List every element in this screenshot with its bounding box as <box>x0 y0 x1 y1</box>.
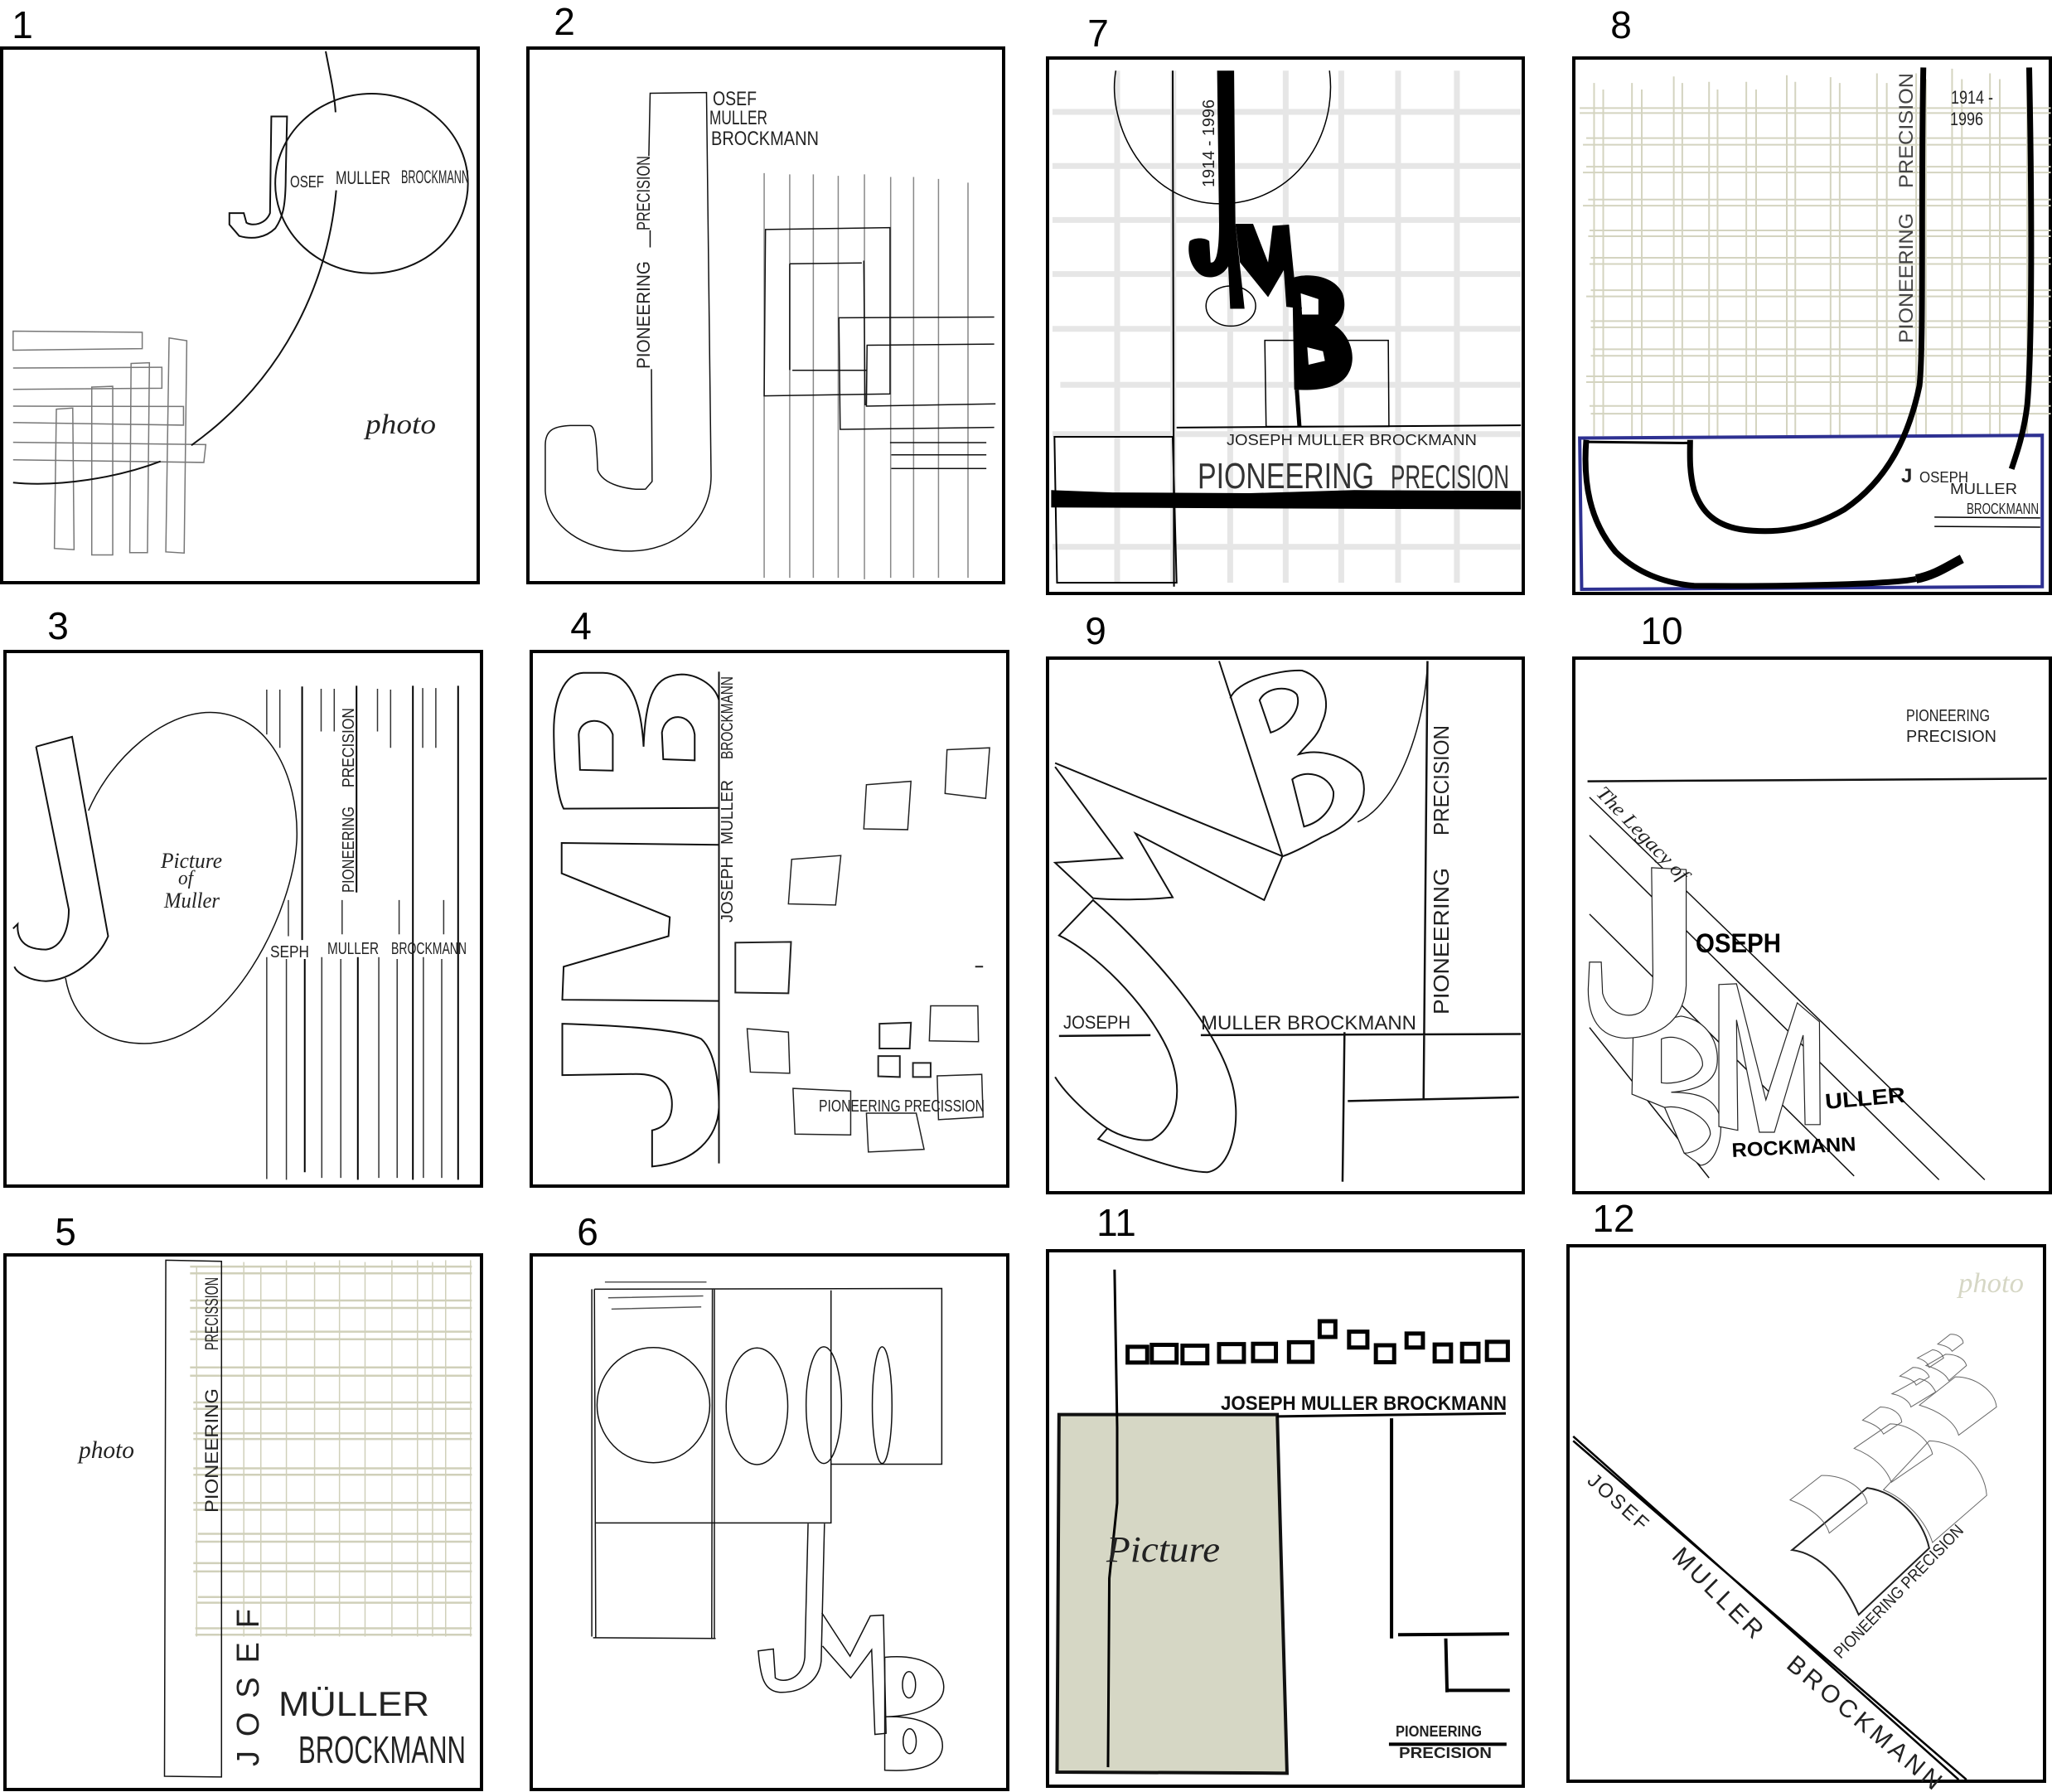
panel 7 dates: 1914 - 1996 <box>1200 99 1218 187</box>
panel 5 photo label: photo <box>77 1436 134 1464</box>
number 9: 9 <box>1085 609 1106 652</box>
panel 9 rules <box>1059 661 1521 1182</box>
panel 7 grey grid <box>1053 70 1521 583</box>
panel 2 frame <box>528 48 1004 583</box>
panel 5 BROCKMANN: BROCKMANN <box>298 1728 466 1771</box>
panel 8 frame <box>1574 58 2050 593</box>
panel 11 rules and L shapes <box>1277 1413 1510 1744</box>
panel 11 row of squares <box>1128 1321 1508 1363</box>
panel 10 bold name: ULLER <box>1824 1082 1906 1114</box>
panel 12 diagonal name: MULLER <box>1667 1543 1769 1644</box>
panel 10 outlined JBM letters <box>1588 868 1820 1165</box>
panel 2 name text: BROCKMANN <box>711 128 819 150</box>
panel 10 rules and diagonals <box>1588 778 2047 1179</box>
panel 3 name text <box>270 940 467 961</box>
panel 3 vertical title <box>340 708 358 893</box>
panel 9 vertical title: PRECISION <box>1429 725 1454 835</box>
panel 10 title: PRECISION <box>1906 728 1996 746</box>
number 1: 1 <box>12 3 33 46</box>
panel 3 J outline <box>13 737 108 981</box>
panel 6 frame <box>531 1255 1008 1790</box>
panel 6 JMB outline <box>758 1523 944 1770</box>
panel 8 dates <box>1950 87 1993 129</box>
panel 1 name text: OSEF <box>290 173 324 191</box>
panel 12 diagonal title: PIONEERING PRECISION <box>1831 1522 1967 1662</box>
panel 9 tilted B <box>1219 661 1427 856</box>
panel 8 name: J <box>1901 465 1912 487</box>
panel 12 <box>1568 1197 2045 1792</box>
number 3: 3 <box>47 604 69 647</box>
panel 9 tilted J <box>1055 900 1236 1172</box>
panel 9 frame <box>1048 658 1523 1193</box>
panel 11 name: JOSEPH MULLER BROCKMANN <box>1221 1392 1507 1415</box>
panel 12 double diagonal <box>1573 1436 1967 1780</box>
panel 9 name text: JOSEPH <box>1063 1012 1130 1033</box>
panel 5 vertical JOSEF: JOSEF <box>231 1609 266 1766</box>
panel 3 picture label <box>160 849 222 913</box>
panel 8 <box>1574 3 2050 593</box>
panel 2 vertical title: PRECISION <box>633 156 654 230</box>
panel 1 photo label: photo <box>364 409 436 440</box>
panel 7 name: JOSEPH MULLER BROCKMANN <box>1227 432 1477 448</box>
panel 12 frame <box>1568 1246 2045 1781</box>
panel 10 bold name <box>1696 928 1906 1162</box>
panel 4 title: PIONEERING PRECISSION <box>819 1097 985 1116</box>
panel 10 title: PIONEERING <box>1906 707 1990 725</box>
panel 8 name: MULLER <box>1950 481 2017 497</box>
panel 5 green grid <box>190 1260 472 1636</box>
panel 9 <box>1048 609 1523 1193</box>
panel 4 vertical name: JOSEPH <box>719 856 737 923</box>
panel 4 scattered squares <box>735 748 990 1152</box>
number 12: 12 <box>1592 1197 1635 1240</box>
panel 5 frame <box>5 1255 482 1790</box>
panel 3 name text: SEPH <box>270 943 309 961</box>
panel 3 photo ellipse <box>65 712 297 1044</box>
panel 9 vertical title <box>1429 725 1454 1015</box>
number 2: 2 <box>554 0 575 43</box>
panel 10 title <box>1906 707 1996 746</box>
panel 9 vertical title: PIONEERING <box>1429 868 1454 1015</box>
panel 7 solid JMB monogram <box>1051 70 1521 510</box>
panel 8 vertical title: PIONEERING <box>1895 213 1918 343</box>
panel 11 vertical line <box>1108 1270 1117 1767</box>
panel 7 frame <box>1048 58 1523 593</box>
panel 12 diagonal name: JOSEF <box>1583 1469 1653 1535</box>
panel 5 vertical title <box>201 1277 222 1513</box>
panel 12 photo label: photo <box>1957 1268 2024 1299</box>
panel 9 name text: MULLER BROCKMANN <box>1201 1012 1416 1034</box>
panel 1 name text <box>290 167 469 191</box>
panel 4 rotated JMB outline <box>554 671 719 1166</box>
number 8: 8 <box>1610 3 1632 46</box>
panel 3 name text: BROCKMANN <box>391 940 467 958</box>
panel 11 title: PIONEERING <box>1396 1723 1482 1740</box>
panel 1 name text: BROCKMANN <box>401 167 469 187</box>
panel 12 diagonal name: BROCKMANN <box>1782 1650 1947 1792</box>
number 7: 7 <box>1087 12 1109 55</box>
panel 8 name <box>1901 465 2039 517</box>
panel 8 dates: 1996 <box>1950 109 1983 129</box>
panel 3 name text: MULLER <box>327 940 379 958</box>
panel 10 <box>1574 609 2050 1193</box>
panel 8 dates: 1914 - <box>1951 87 1993 108</box>
panel 11 frame <box>1048 1251 1523 1786</box>
number 6: 6 <box>577 1210 598 1253</box>
panel 7 title: PIONEERING <box>1198 456 1374 496</box>
panel 6 <box>531 1210 1008 1790</box>
panel 7 outlines <box>1054 70 1521 587</box>
panel 8 blue rectangle <box>1580 435 2042 589</box>
panel 2 J outline <box>545 93 711 551</box>
panel 3 vertical lines <box>267 685 458 1179</box>
panel 5 <box>5 1210 482 1790</box>
number 11: 11 <box>1096 1201 1136 1244</box>
panel 3 picture label: Picture <box>160 849 222 873</box>
panel 7 title: PRECISION <box>1391 459 1509 496</box>
panel 1 bars <box>13 332 206 555</box>
panel 11 <box>1048 1201 1523 1786</box>
panel 8 green grid <box>1580 69 2050 436</box>
number 10: 10 <box>1640 609 1683 652</box>
panel 5 vertical title: PRECISSION <box>201 1277 222 1350</box>
panel 10 bold name: ROCKMANN <box>1731 1133 1856 1162</box>
panel 8 vertical title: PRECISION <box>1895 73 1918 188</box>
panel 10 frame <box>1574 658 2050 1193</box>
panel 4 <box>531 604 1008 1186</box>
panel 5 tall rectangle <box>164 1260 221 1777</box>
panel 2 grid and rectangles <box>764 173 995 579</box>
panel 5 MULLER: MÜLLER <box>278 1684 429 1723</box>
panel 4 vertical name: BROCKMANN <box>719 676 737 759</box>
panel 11 picture label: Picture <box>1106 1529 1220 1570</box>
panel 4 vertical name <box>719 676 737 923</box>
panel 4 frame <box>531 651 1008 1186</box>
number 5: 5 <box>55 1210 76 1253</box>
panel 5 vertical title: PIONEERING <box>201 1388 222 1513</box>
panel 12 curved tiles <box>1790 1334 1996 1615</box>
panel 3 picture label: of <box>178 868 196 889</box>
panel 10 bold name: OSEPH <box>1696 928 1781 958</box>
panel 3 vertical title: PIONEERING <box>340 806 358 893</box>
panel 3 picture label: Muller <box>163 889 220 913</box>
panel 1 <box>2 3 478 583</box>
panel 11 picture block <box>1057 1415 1287 1773</box>
panel 3 frame <box>5 651 482 1186</box>
panel 8 vertical title <box>1895 73 1918 343</box>
panel 1 frame <box>2 48 478 583</box>
panel 3 <box>5 604 482 1186</box>
panel 2 vertical title <box>633 156 654 369</box>
panel 2 name text: OSEF <box>713 88 757 110</box>
panel 9 tilted M <box>1055 763 1282 900</box>
panel 10 legacy label: The Legacy of <box>1592 782 1695 888</box>
number 4: 4 <box>570 604 592 647</box>
panel 1 name text: MULLER <box>336 167 390 188</box>
panel 1 circle, curve and J <box>13 51 468 484</box>
panel 2 <box>528 0 1004 583</box>
panel 8 thick J strokes <box>1585 67 2040 586</box>
panel 6 narrowing ellipses <box>597 1347 892 1465</box>
panel 2 name text: MULLER <box>709 107 767 129</box>
panel 8 name: OSEPH <box>1919 469 1968 486</box>
panel 12 diagonal name <box>1583 1469 1947 1792</box>
panel 11 title <box>1396 1723 1492 1761</box>
panel 4 vertical name: MULLER <box>719 780 737 845</box>
panel 7 <box>1048 12 1523 593</box>
panel 6 column grid <box>592 1282 941 1639</box>
panel 2 vertical title: PIONEERING <box>633 261 654 369</box>
panel 11 title: PRECISION <box>1399 1745 1492 1761</box>
panel 9 name text <box>1063 1012 1416 1034</box>
panel 3 vertical title: PRECISION <box>340 708 358 787</box>
panel 2 name text <box>709 88 819 150</box>
